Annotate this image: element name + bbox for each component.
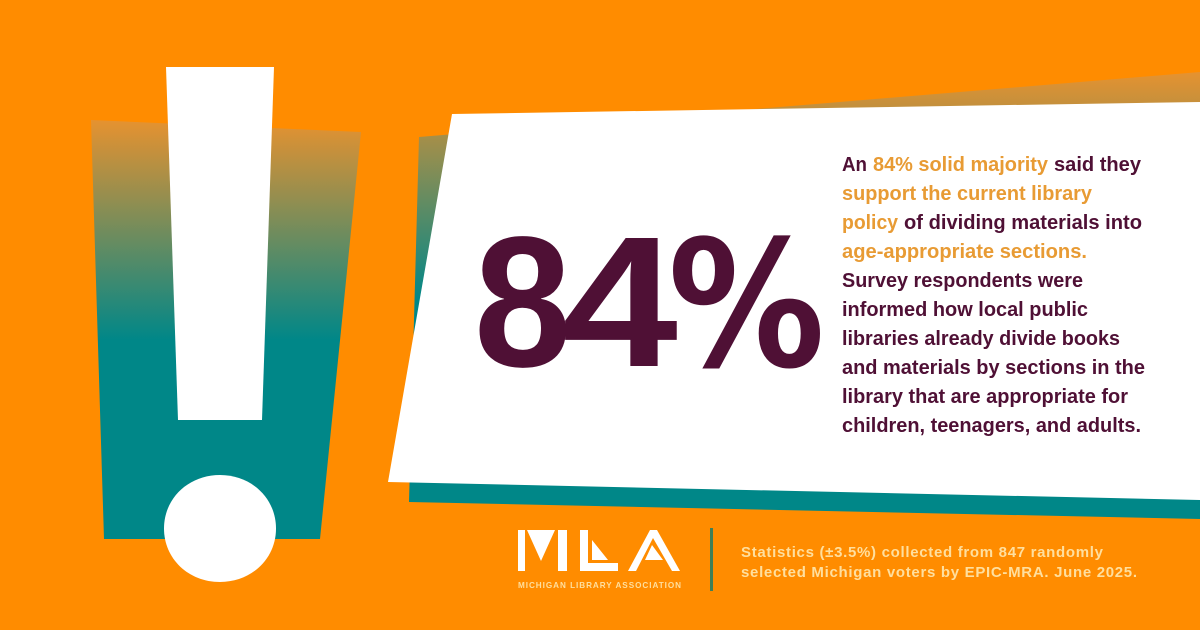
footnote xyxy=(741,544,1137,581)
text block: description: support the current library xyxy=(842,183,1093,205)
logo letter M xyxy=(518,530,567,571)
logo letter L xyxy=(580,530,618,571)
text block: description xyxy=(842,154,1145,437)
card shadow xyxy=(409,72,1200,519)
big number: 8 xyxy=(474,199,571,406)
text block: description: libraries already divide books xyxy=(842,328,1120,350)
panel: statistic card xyxy=(388,72,1200,519)
logo letter A xyxy=(628,530,680,571)
logo: Michigan Library Association xyxy=(518,530,682,590)
logo tagline: MICHIGAN LIBRARY ASSOCIATION xyxy=(518,580,682,590)
card face xyxy=(388,102,1200,500)
divider xyxy=(710,528,713,591)
footnote: selected Michigan voters by EPIC-MRA. June 2025. xyxy=(741,564,1137,581)
exclamation dot xyxy=(164,475,276,582)
footnote: Statistics (±3.5%) collected from 847 randomly xyxy=(741,544,1104,561)
exclamation bar xyxy=(166,67,274,420)
text block: description: said they xyxy=(1054,154,1142,176)
big number xyxy=(474,197,825,408)
exclamation backing shape xyxy=(91,120,361,539)
big number: % xyxy=(668,203,825,408)
text block: description: policy xyxy=(842,212,899,234)
text block: description: informed how local public xyxy=(842,299,1088,321)
icon: exclamation mark xyxy=(91,67,361,582)
text block: description: library that are appropriate for xyxy=(842,386,1128,408)
text block: description: and materials by sections in the xyxy=(842,357,1145,379)
text block: description: of dividing materials into xyxy=(904,212,1142,234)
text block: description: 84% solid majority xyxy=(873,154,1049,176)
big number: 4 xyxy=(562,197,678,406)
text block: description: An xyxy=(842,154,867,176)
text block: description: Survey respondents were xyxy=(842,270,1083,292)
text block: description: children, teenagers, and adults. xyxy=(842,415,1141,437)
text block: description: age-appropriate sections. xyxy=(842,241,1087,263)
